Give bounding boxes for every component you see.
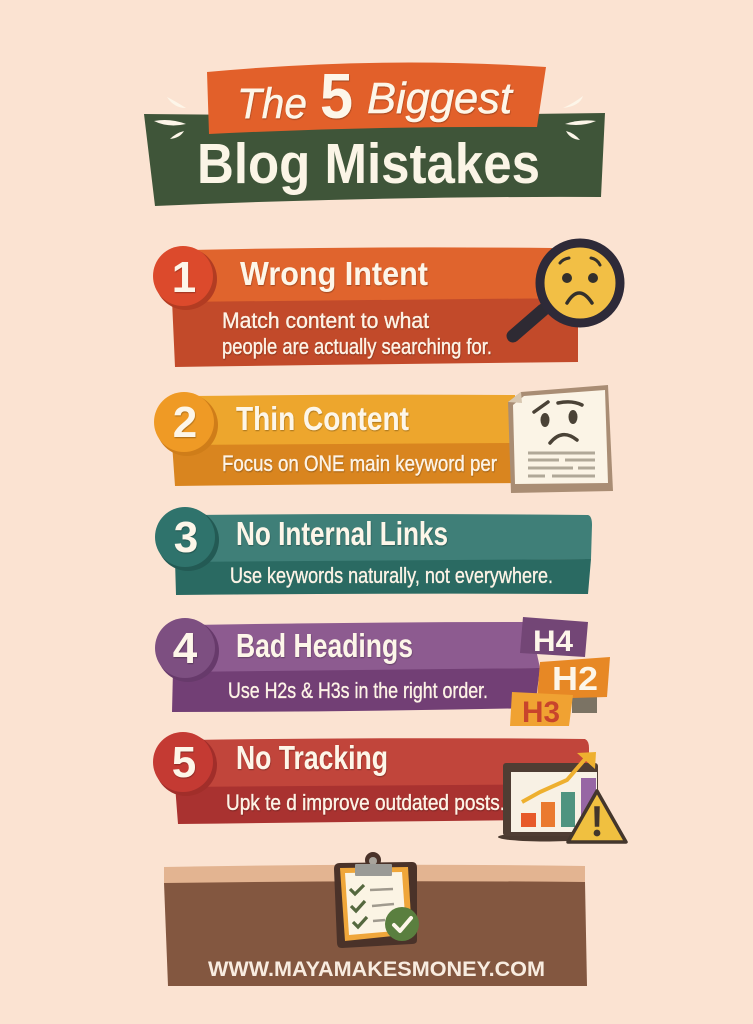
mistake 3 panel — [155, 507, 592, 595]
lower bar — [172, 298, 578, 367]
number badge — [154, 392, 218, 456]
number badge — [155, 507, 219, 571]
title banner — [144, 60, 605, 206]
heading line one: 5 — [320, 60, 353, 132]
tan band — [164, 865, 585, 884]
upper bar — [172, 247, 578, 302]
icon: laptop chart with warning — [498, 752, 626, 842]
footer panel — [164, 852, 587, 986]
body text: Upk te d improve outdated posts. — [226, 790, 505, 815]
mistake 5 panel — [153, 732, 626, 842]
body text — [222, 308, 492, 359]
icon: heading tags — [510, 617, 610, 729]
body text: Match content to what — [222, 308, 429, 333]
brown block — [164, 881, 587, 986]
heading: Bad Headings — [236, 627, 413, 664]
lower bar — [172, 441, 520, 486]
heading: Thin Content — [236, 400, 409, 437]
warning triangle — [568, 791, 626, 842]
heading line one: Biggest — [367, 74, 514, 123]
green banner — [144, 113, 605, 206]
heading line one — [237, 60, 514, 132]
heading: No Internal Links — [236, 515, 448, 552]
number badge: 4 — [173, 624, 198, 673]
body text: people are actually searching for. — [222, 334, 492, 359]
number badge: 1 — [172, 253, 196, 302]
mistake 2 panel — [154, 385, 613, 493]
tag H2: H2 — [552, 660, 598, 697]
upper bar — [175, 514, 592, 562]
footer url: WWW.MAYAMAKESMONEY.COM — [208, 958, 545, 981]
upper bar — [172, 395, 515, 445]
number badge — [153, 732, 217, 796]
tag H4: H4 — [533, 625, 573, 658]
heading: Wrong Intent — [240, 255, 428, 292]
heading line two: Blog Mistakes — [197, 132, 540, 196]
body text: Use keywords naturally, not everywhere. — [230, 563, 553, 588]
heading line one: The — [237, 80, 307, 128]
heading: No Tracking — [236, 739, 388, 776]
body text: Use H2s & H3s in the right order. — [228, 678, 488, 703]
icon: clipboard checklist — [334, 852, 419, 948]
number badge — [155, 618, 219, 682]
orange ribbon — [207, 63, 546, 134]
lower bar — [172, 668, 540, 712]
body text: Focus on ONE main keyword per — [222, 451, 497, 476]
number badge: 2 — [173, 398, 197, 447]
icon: sad document — [508, 385, 613, 493]
mistake 1 panel — [153, 243, 620, 367]
mistake 4 panel — [155, 617, 610, 729]
icon: magnifier with sad face — [513, 243, 620, 336]
tag H3: H3 — [522, 696, 560, 729]
upper bar — [175, 738, 589, 787]
lower bar — [175, 559, 591, 595]
lower bar — [175, 784, 530, 824]
green check badge — [385, 907, 419, 941]
upper bar — [173, 622, 540, 672]
decorative sparks — [154, 96, 596, 140]
number badge — [153, 246, 217, 310]
number badge: 5 — [172, 738, 196, 787]
number badge: 3 — [174, 513, 198, 562]
